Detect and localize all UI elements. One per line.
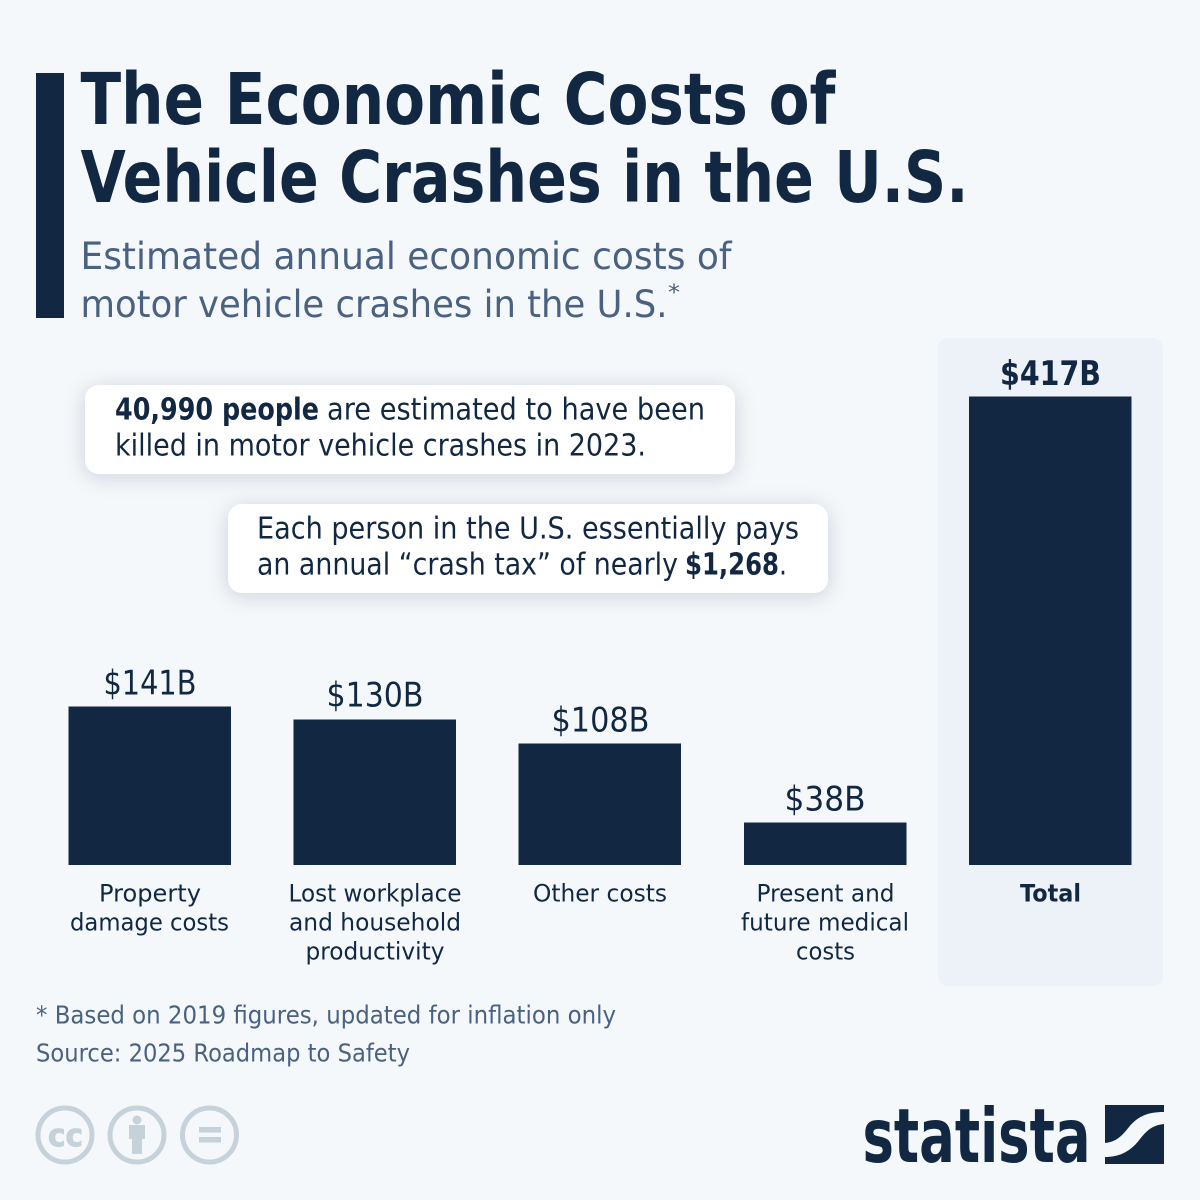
title: Vehicle Crashes in the U.S. [80, 136, 968, 219]
callout: crash tax [228, 504, 828, 593]
callout: crash tax: an annual “crash tax” of nearly [257, 548, 678, 582]
subtitle: Estimated annual economic costs of [80, 234, 732, 278]
title accent bar [36, 73, 64, 318]
source: Source: 2025 Roadmap to Safety [36, 1038, 410, 1068]
bar: present and future medical costs: costs [796, 938, 855, 966]
callout: people killed: killed in motor vehicle crashes in 2023. [115, 428, 646, 464]
bar: other costs [518, 700, 681, 908]
bar: property damage costs: damage costs [70, 908, 229, 936]
icon: attribution [110, 1108, 164, 1162]
icon: creative commons [38, 1108, 92, 1162]
callout: crash tax: Each person in the U.S. essentially pays [257, 512, 799, 546]
bar: other costs: $108B [552, 700, 650, 740]
footnote: * Based on 2019 figures, updated for inflation only [36, 1000, 616, 1030]
subtitle [80, 234, 732, 326]
bar: property damage costs: $141B [104, 664, 196, 702]
callout: crash tax: $1,268 [685, 548, 779, 582]
bar: present and future medical costs: future medical [741, 908, 909, 936]
callout: people killed [85, 385, 735, 474]
icon: statista logo [1105, 1105, 1164, 1164]
callout: crash tax: . [779, 548, 787, 582]
bar: property damage costs: Property [99, 880, 201, 908]
bar: present and future medical costs [741, 780, 909, 966]
bar: lost workplace and household productivity: productivity [306, 938, 444, 966]
icon: creative commons: cc [48, 1118, 83, 1154]
bar: property damage costs [68, 664, 231, 936]
subtitle: motor vehicle crashes in the U.S. [80, 282, 668, 326]
title: The Economic Costs of [80, 58, 836, 141]
bar: lost workplace and household productivity [288, 676, 462, 966]
bar: total [969, 354, 1132, 908]
bar: lost workplace and household productivity: and household [289, 908, 461, 936]
bar: lost workplace and household productivity: $130B [326, 676, 424, 714]
subtitle: * [668, 281, 680, 306]
callout: people killed: 40,990 people [115, 392, 319, 428]
bar: lost workplace and household productivity: Lost workplace [288, 880, 462, 908]
callout: people killed: are estimated to have been [327, 392, 705, 428]
bar: total: Total [1020, 880, 1081, 908]
bar: present and future medical costs: Present and [756, 880, 894, 908]
statista wordmark: statista [862, 1092, 1090, 1180]
icon: no derivatives [182, 1108, 236, 1162]
bar: present and future medical costs: $38B [784, 780, 866, 818]
panel: total highlight [938, 338, 1163, 986]
title [80, 58, 968, 219]
bar: total: $417B [1000, 354, 1101, 393]
bar: other costs: Other costs [533, 880, 667, 908]
